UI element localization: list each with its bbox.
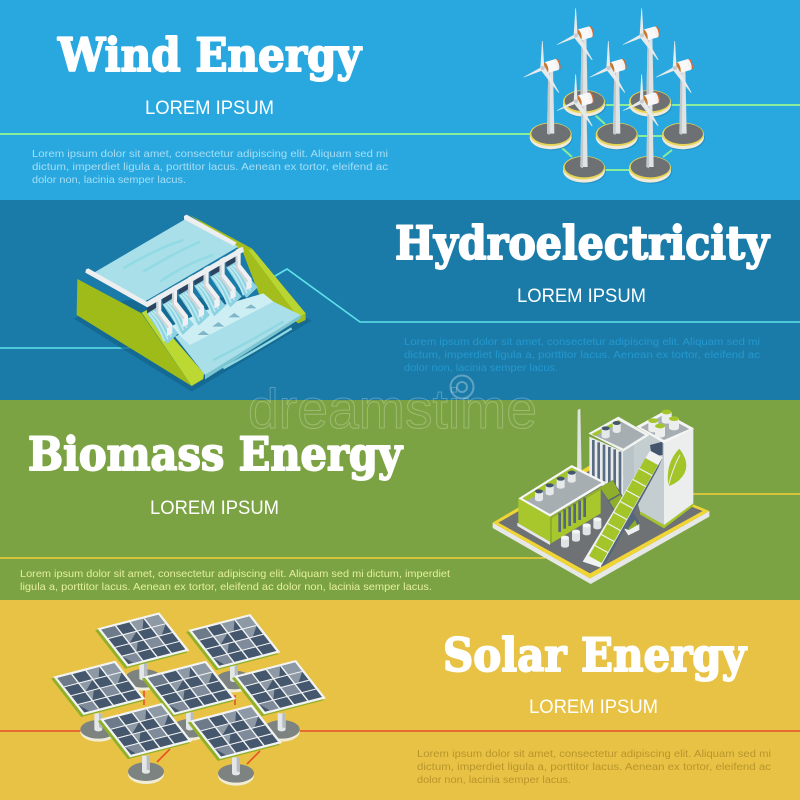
subheading: hydro: LOREM IPSUM	[517, 286, 646, 307]
text block: biomass: Lorem ipsum dolor sit amet, consectetur adipiscing elit. Aliquam sed mi dictum, imperdiet	[20, 568, 450, 580]
text block: wind	[32, 148, 388, 186]
text block: solar	[417, 748, 771, 786]
panel: hydroelectricity	[0, 200, 800, 400]
panel: solar energy	[0, 600, 800, 800]
heading: biomass energy: Biomass Energy	[28, 427, 403, 481]
connection lines: hydro	[0, 347, 130, 349]
illustration: solar panels	[50, 612, 327, 786]
text block: hydro: dolor non, lacinia semper lacus.	[404, 362, 558, 374]
subheading: solar: LOREM IPSUM	[529, 697, 658, 718]
text block: wind: dictum, imperdiet ligula a, porttitor lacus. Aenean ex tortor, eleifend ac	[32, 161, 388, 173]
text block: wind: dolor non, lacinia semper lacus.	[32, 174, 186, 186]
text block: solar: Lorem ipsum dolor sit amet, consectetur adipiscing elit. Aliquam sed mi	[417, 748, 771, 760]
connection lines: wind	[0, 105, 800, 170]
text block: hydro: dictum, imperdiet ligula a, porttitor lacus. Aenean ex tortor, eleifend ac	[404, 349, 760, 361]
panel: wind energy	[0, 0, 800, 200]
text block: biomass: ligula a, porttitor lacus. Aenean ex tortor, eleifend ac dolor non, lacinia semper lacus.	[20, 581, 432, 593]
text block: solar: dolor non, lacinia semper lacus.	[417, 774, 571, 786]
text block: solar: dictum, imperdiet ligula a, porttitor lacus. Aenean ex tortor, eleifend ac	[417, 761, 771, 773]
text block: hydro	[404, 336, 760, 374]
watermark: dreamstime	[248, 377, 537, 440]
connection lines: biomass	[0, 557, 545, 559]
subheading: biomass: LOREM IPSUM	[150, 498, 279, 519]
text block: hydro: Lorem ipsum dolor sit amet, consectetur adipiscing elit. Aliquam sed mi	[404, 336, 760, 348]
illustration: biomass plant	[493, 409, 709, 584]
text block: biomass	[20, 568, 450, 593]
heading: wind energy: Wind Energy	[57, 28, 362, 82]
panel: biomass energy	[0, 400, 800, 600]
text block: wind: Lorem ipsum dolor sit amet, consectetur adipiscing elit. Aliquam sed mi	[32, 148, 388, 160]
illustration: wind turbines	[523, 8, 705, 184]
illustration: hydro dam	[73, 215, 312, 392]
heading: solar energy: Solar Energy	[443, 628, 747, 682]
subheading: wind: LOREM IPSUM	[145, 98, 274, 119]
connection lines: solar	[0, 690, 800, 764]
